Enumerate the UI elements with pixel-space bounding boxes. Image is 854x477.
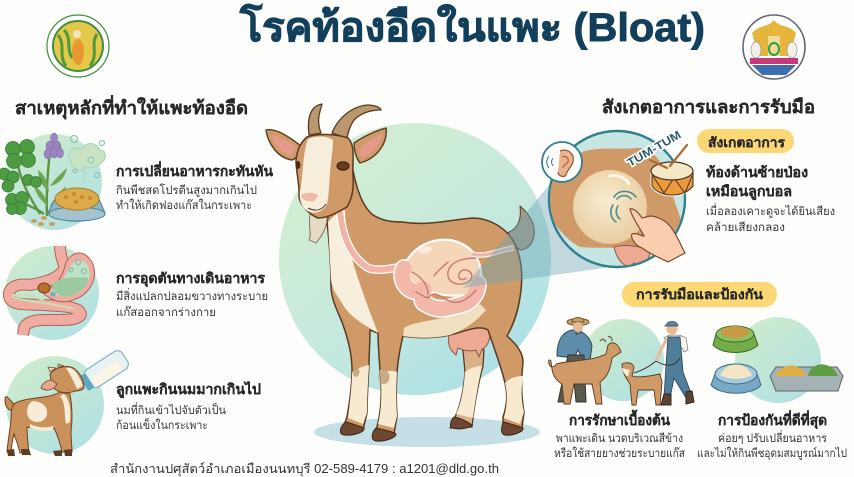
cause 1 description: กินพืชสดโปรตีนสูงมากเกินไป [116,183,257,197]
icon: drum with TUM-TUM: TUM-TUM [626,129,683,170]
ear left [266,130,301,160]
first aid description: หรือใช้สายยางช่วยระบายแก๊ส [554,447,685,460]
sound waves [611,191,636,222]
heading: causes: สาเหตุหลักที่ทำให้แพะท้องอืด [15,95,248,120]
symptom heading: ท้องด้านซ้ายป่อง [706,164,808,180]
icon: drum with TUM-TUM [626,129,693,195]
pill: symptoms: สังเกตอาการ [708,135,786,150]
cause 2 description: มีสิ่งแปลกปลอมขวางทางระบาย [116,288,268,303]
intestine folds [412,258,476,302]
green bowl [713,334,758,352]
cause 1 description [116,183,257,212]
cause 1 description: ทำให้เกิดฟองแก๊สในกระเพาะ [116,199,252,212]
ground shadow [314,417,540,447]
tail [507,206,534,250]
title: โรคท้องอืดในแพะ (Bloat) [239,4,705,50]
cause 1 heading: การเปลี่ยนอาหารกะทันหัน [116,161,273,179]
cause 3 description [116,402,226,432]
symptom description [706,203,835,234]
intestine to rear [472,248,514,255]
panel: cause 3 [5,348,261,456]
heading: observe and respond: สังเกตอาการและการรับมือ [602,97,815,117]
illustration: feed bowls and tray [711,317,843,403]
prevention description: ค่อยๆ ปรับเปลี่ยนอาหาร [718,430,827,445]
bottle [78,348,131,393]
cause 2 heading: การอุดตันทางเดินอาหาร [116,270,265,287]
icon: kid goat drinking from a bottle [5,348,131,456]
horn right [332,105,381,138]
logo: royal seal right [743,15,805,79]
pill: response and prevention: การรับมือและป้องกัน [636,287,764,302]
horn left [308,104,322,135]
udder [448,316,490,357]
panel: symptoms [697,129,835,234]
head [296,134,353,218]
first aid description [554,432,685,460]
symptom heading [706,164,808,200]
first aid description: พาแพะเดิน นวดบริเวณสีข้าง [556,432,683,445]
footer contact: สำนักงานปศุสัตว์อำเภอเมืองนนทบุรี 02-589-4179 : a1201@dld.go.th [110,462,499,477]
far hind leg [450,340,484,428]
callout cone [463,155,610,288]
chest and belly patch [328,210,378,333]
panel: prevention [697,317,847,460]
small goat [622,363,662,405]
cause 3 heading: ลูกแพะกินนมมากเกินไป [116,380,261,398]
blue bowl [711,374,761,393]
illustration: farmer, handler and goats [549,318,694,405]
pill: response and prevention [622,282,777,307]
leg markings [348,365,524,428]
esophagus [340,210,406,270]
farmer [557,330,592,362]
logo: department seal left [47,15,109,77]
tray [770,367,843,391]
central gradient circle [279,123,551,395]
cause 3 description: ก้อนแข็งในกระเพาะ [116,417,208,432]
panel: first aid [549,318,694,460]
cause 2 description: แก๊สออกจากร่างกาย [116,306,216,319]
rumen and stomach chambers [405,240,481,296]
lower stomach lobes [402,268,478,309]
first aid heading: การรักษาเบื้องต้น [569,409,670,428]
symptom description: เมื่อลองเคาะดูจะได้ยินเสียง [706,203,835,218]
symptom description: คล้ายเสียงกลอง [706,221,785,234]
icon: blocked stomach and intestine [5,246,99,340]
face blaze [300,136,333,213]
symptom heading: เหมือนลูกบอล [706,183,792,200]
beard [309,214,327,243]
cause 3 description: นมที่กินเข้าไปจับตัวเป็น [116,402,226,417]
ear right [354,128,386,163]
large goat [549,343,621,404]
handler [666,324,678,334]
neck underside line [326,208,338,222]
hooves [340,417,523,441]
belly in magnifier [545,148,686,266]
cause 2 description [116,288,268,319]
goat illustration [266,104,534,441]
nose and mouth [301,193,318,201]
panel: cause 1 [0,133,273,230]
icon: hand tapping [630,209,685,262]
panel: cause 2 [5,246,268,340]
body and near legs [327,165,524,438]
prevention description [697,430,847,460]
icon: ear badge [542,142,582,182]
callout magnifier: left flank [542,129,693,267]
prevention heading: การป้องกันที่ดีที่สุด [718,410,827,429]
icon: clover, alfalfa, feed bowl and gas [0,133,105,230]
eyes [337,162,349,170]
